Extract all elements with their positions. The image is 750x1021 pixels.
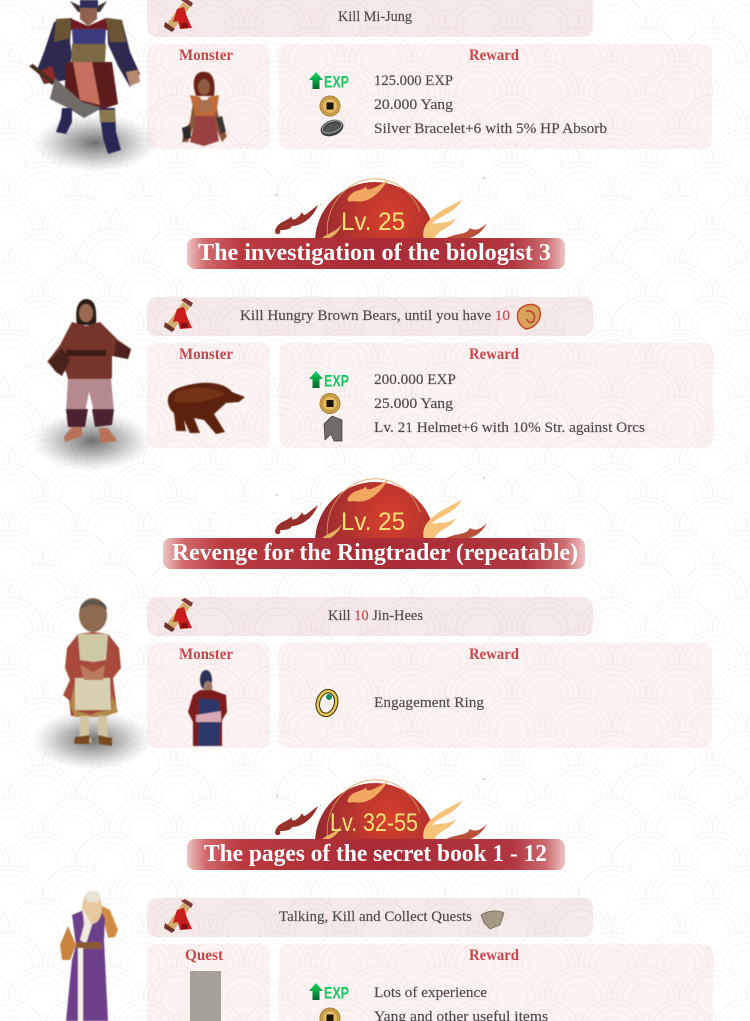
icon: rock xyxy=(481,911,504,929)
icon: scroll xyxy=(164,0,193,32)
monster panel: Monster xyxy=(179,646,233,663)
quest objective bar xyxy=(147,898,593,937)
reward panel xyxy=(279,944,713,1021)
icon: helmet xyxy=(324,416,342,441)
quest panel: Quest xyxy=(185,947,224,964)
quest objective bar: Kill Mi-Jung xyxy=(338,9,412,25)
reward panel: Reward xyxy=(469,646,519,663)
monster: Jin-Hee xyxy=(188,670,227,746)
character: warrior xyxy=(29,0,157,172)
reward panel: Lots of experience xyxy=(374,985,487,1001)
icon: yang coin xyxy=(320,393,340,414)
heading: The investigation of the biologist 3: Lv. 25 xyxy=(341,208,405,236)
reward panel: Reward xyxy=(469,47,519,64)
heading: The investigation of the biologist 3: The investigation of the biologist 3 xyxy=(198,240,551,266)
icon: ring xyxy=(315,689,339,717)
quest objective bar: Talking, Kill and Collect Quests xyxy=(279,909,472,925)
reward panel xyxy=(279,44,712,149)
panel: quest Hungry Brown Bears xyxy=(32,297,713,471)
monster: brown bear xyxy=(168,383,245,434)
panel: quest secret book xyxy=(60,891,713,1021)
icon: scroll xyxy=(164,298,193,332)
reward panel: Reward xyxy=(469,346,519,363)
heading: Revenge for the Ringtrader (repeatable): Lv. 25 xyxy=(341,508,405,536)
quest objective bar xyxy=(147,297,593,336)
icon: yang coin xyxy=(320,1008,340,1021)
level emblem xyxy=(275,477,487,602)
icon: exp xyxy=(309,371,349,390)
quest objective bar xyxy=(147,597,593,636)
reward panel: Engagement Ring xyxy=(374,695,484,711)
monster: woman xyxy=(182,72,227,146)
heading: The pages of the secret book 1 - 12 xyxy=(187,778,565,903)
panel: quest Kill Mi-Jung xyxy=(29,0,712,172)
heading: The pages of the secret book 1 - 12: The pages of the secret book 1 - 12 xyxy=(204,841,547,867)
monster panel xyxy=(147,643,270,748)
reward panel xyxy=(279,343,713,448)
icon: metin stone xyxy=(190,971,221,1021)
reward panel: 200.000 EXP xyxy=(374,372,456,388)
quest objective bar: Kill Hungry Brown Bears, until you have 10 xyxy=(240,308,510,324)
character: sage xyxy=(60,891,118,1021)
icon: exp xyxy=(309,72,349,92)
monster panel xyxy=(147,44,270,149)
monster panel: Monster xyxy=(179,346,233,363)
icon: yang coin xyxy=(320,96,340,116)
icon: scroll xyxy=(164,899,193,933)
reward panel xyxy=(279,643,712,748)
character: biologist xyxy=(32,299,152,471)
heading: The investigation of the biologist 3 xyxy=(187,177,565,302)
quest objective bar xyxy=(147,0,593,37)
reward panel: 20.000 Yang xyxy=(374,97,454,113)
reward panel: 25.000 Yang xyxy=(374,396,454,412)
icon: shell xyxy=(517,305,540,329)
level emblem xyxy=(275,778,487,903)
reward panel: Reward xyxy=(469,947,519,964)
quest panel xyxy=(147,944,270,1021)
heading: Revenge for the Ringtrader (repeatable): Revenge for the Ringtrader (repeatable) xyxy=(172,540,578,566)
monster panel: Monster xyxy=(179,47,233,64)
reward panel: 125.000 EXP xyxy=(374,73,453,89)
monster panel xyxy=(147,343,270,448)
level emblem xyxy=(275,177,487,302)
panel: quest Jin-Hees xyxy=(32,597,712,770)
quest objective bar: Kill 10 Jin-Hees xyxy=(328,608,423,624)
icon: scroll xyxy=(164,598,193,632)
reward panel: Silver Bracelet+6 with 5% HP Absorb xyxy=(374,121,607,137)
icon: bracelet xyxy=(321,118,343,137)
icon: exp xyxy=(309,983,349,1002)
heading: The pages of the secret book 1 - 12: Lv. 32-55 xyxy=(330,809,418,837)
heading: Revenge for the Ringtrader (repeatable) xyxy=(163,477,585,602)
reward panel: Lv. 21 Helmet+6 with 10% Str. against Orcs xyxy=(374,420,645,436)
character: old woman xyxy=(32,598,152,770)
